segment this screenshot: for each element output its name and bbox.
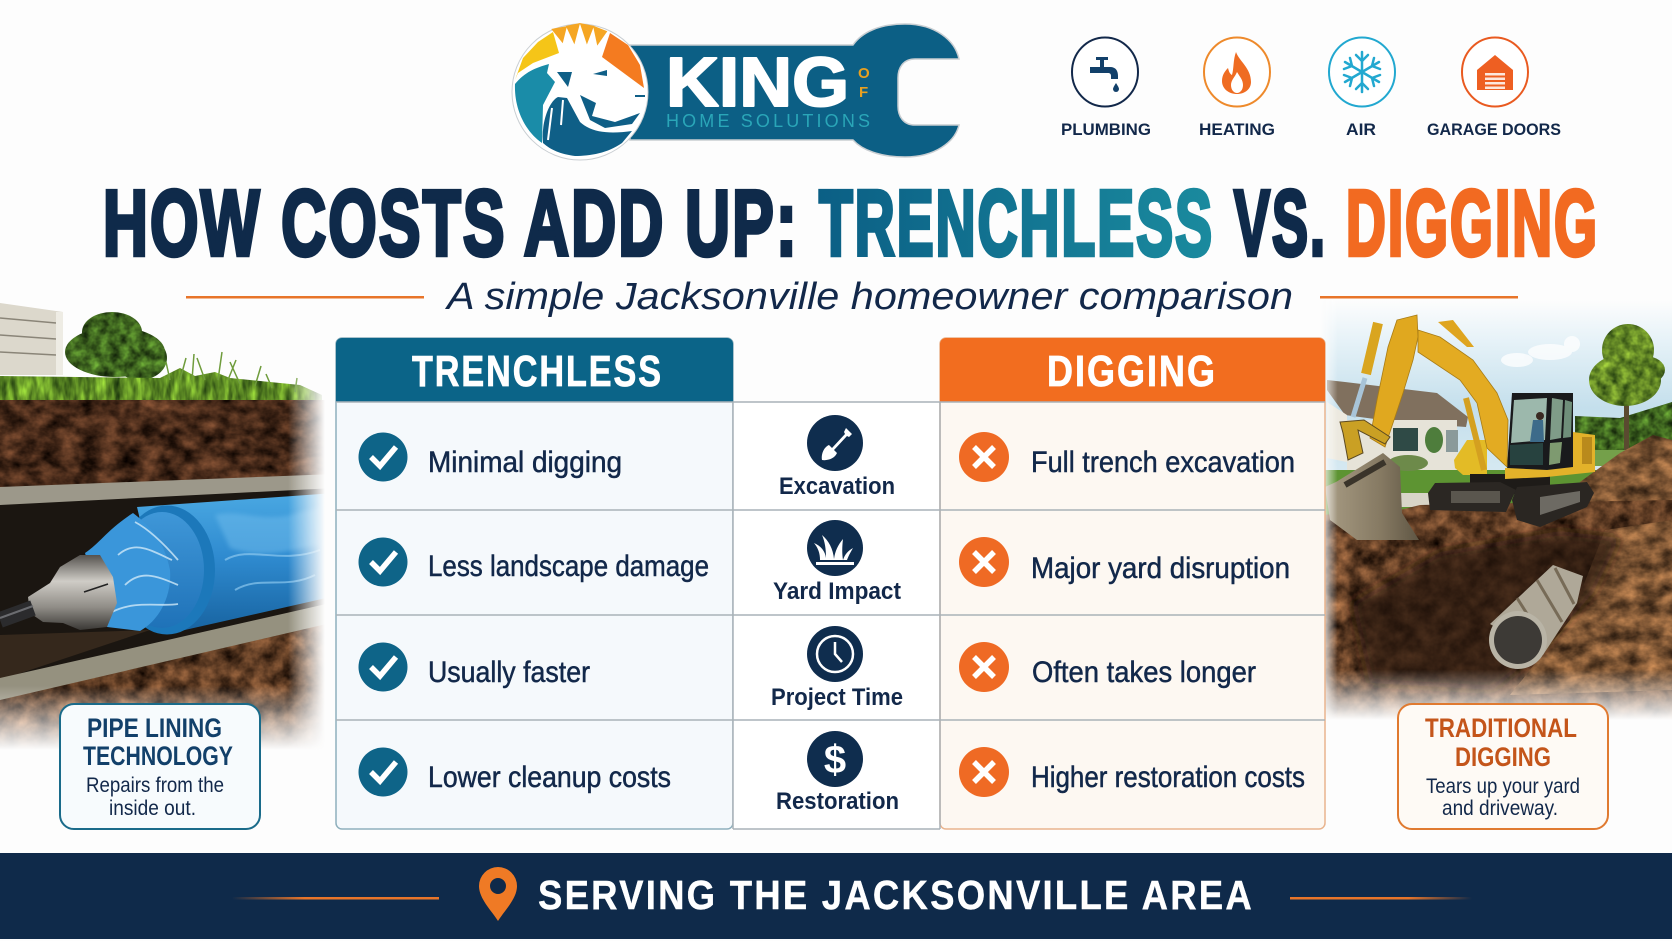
category: restoration: $ — [824, 738, 846, 782]
callout: pipe lining technology: Repairs from the — [86, 774, 224, 797]
rear tracks — [1428, 482, 1516, 512]
footer banner — [0, 853, 1672, 939]
row: usually faster: Usually faster — [428, 656, 590, 689]
row: lower cleanup costs — [358, 748, 671, 796]
logo tagline: HOME SOLUTIONS — [666, 111, 870, 131]
sky — [1326, 315, 1672, 470]
house — [1327, 380, 1468, 471]
category: yard impact: Yard Impact — [773, 578, 901, 605]
grass — [0, 368, 322, 400]
callout: pipe lining technology: TECHNOLOGY — [83, 741, 233, 771]
counterweight — [1454, 440, 1487, 475]
concrete slabs — [0, 474, 335, 505]
category: restoration: Restoration — [776, 788, 899, 815]
blue liner pipe — [137, 493, 335, 634]
undercarriage — [1470, 474, 1550, 494]
hydraulics — [1366, 323, 1378, 374]
bucket — [1325, 453, 1419, 540]
fence — [0, 303, 63, 375]
row: often takes longer: Often takes longer — [1032, 656, 1256, 689]
clouds — [1501, 336, 1580, 367]
row: minimal digging — [358, 432, 622, 482]
title: VS. — [1234, 171, 1327, 275]
trenchless header — [336, 338, 733, 402]
row: lower cleanup costs: Lower cleanup costs — [428, 761, 671, 794]
logo word KING: KING — [666, 43, 849, 121]
footer text: SERVING THE JACKSONVILLE AREA — [538, 872, 1254, 918]
logo word OF: F — [859, 84, 868, 101]
row: less landscape damage: Less landscape damage — [428, 550, 709, 583]
illustration: excavator digging — [1320, 300, 1672, 720]
linkage — [1340, 420, 1390, 460]
icon: lion badge — [512, 24, 648, 160]
dirt pile — [1580, 435, 1672, 502]
stick — [1370, 315, 1418, 447]
right trench wall — [1510, 520, 1672, 695]
title: TRENCHLESS — [819, 171, 1214, 275]
icon: heating — [1204, 38, 1270, 106]
tree — [1589, 324, 1665, 450]
label: plumbing: PLUMBING — [1061, 120, 1151, 139]
panel: digging column: DIGGING — [1047, 347, 1217, 396]
title: HOW COSTS ADD UP: — [103, 171, 799, 275]
row: usually faster — [358, 642, 590, 692]
row: full trench excavation: Full trench excavation — [1031, 446, 1295, 479]
row: higher restoration costs: Higher restoration costs — [1031, 761, 1305, 794]
icon: air — [1329, 38, 1395, 106]
lawn — [1326, 470, 1596, 515]
subtitle: A simple Jacksonville homeowner comparison — [445, 276, 1293, 318]
callout: pipe lining technology — [60, 704, 260, 829]
row: minimal digging: Minimal digging — [428, 446, 622, 479]
callout: pipe lining technology: inside out. — [109, 797, 196, 820]
cab — [1507, 393, 1573, 470]
row: higher restoration costs — [959, 747, 1305, 797]
callout: traditional digging: DIGGING — [1455, 742, 1551, 772]
trench pit — [1352, 531, 1620, 690]
logo: King of Home Solutions — [512, 24, 959, 160]
excavator — [1325, 315, 1595, 540]
callout: traditional digging — [1398, 704, 1608, 829]
bush — [65, 312, 167, 380]
panel: category column — [733, 402, 940, 829]
panel: trenchless column: TRENCHLESS — [412, 347, 663, 396]
service icons — [1061, 38, 1561, 139]
front tracks — [1512, 482, 1594, 527]
panel: trenchless column — [336, 338, 733, 829]
row: often takes longer — [959, 642, 1256, 692]
row: less landscape damage — [358, 538, 709, 586]
logo word OF: O — [858, 65, 870, 82]
buried pipe — [1489, 565, 1583, 669]
digging header — [940, 338, 1325, 402]
upper soil — [0, 400, 335, 488]
category: yard impact — [773, 520, 901, 605]
category: excavation — [779, 415, 895, 500]
row: major yard disruption: Major yard disruption — [1031, 552, 1290, 585]
callout: traditional digging: Tears up your yard — [1426, 775, 1580, 798]
icon: wrench — [630, 24, 959, 157]
tree line — [1575, 402, 1672, 455]
label: garage doors: GARAGE DOORS — [1427, 120, 1561, 139]
illustration: pipe lining cross-section — [0, 303, 335, 750]
icon: location pin — [479, 867, 517, 921]
callout: traditional digging: TRADITIONAL — [1425, 713, 1577, 743]
label: air: AIR — [1346, 120, 1376, 139]
category: project time: Project Time — [771, 684, 903, 711]
icon: plumbing — [1072, 38, 1138, 106]
icon: garage doors — [1462, 38, 1528, 106]
nozzle and cable — [28, 555, 117, 630]
category: project time — [771, 626, 903, 711]
callout: pipe lining technology: PIPE LINING — [87, 713, 222, 743]
boom — [1418, 330, 1508, 467]
row: full trench excavation — [959, 432, 1295, 482]
category: excavation: Excavation — [779, 473, 895, 500]
category: restoration — [776, 731, 899, 815]
title — [103, 171, 1599, 275]
panel: digging column — [940, 338, 1325, 829]
row: major yard disruption — [959, 537, 1290, 587]
ground dirt — [1320, 500, 1672, 720]
tunnel cavity — [0, 487, 335, 680]
callout: traditional digging: and driveway. — [1442, 797, 1558, 820]
label: heating: HEATING — [1199, 120, 1275, 139]
lower soil — [0, 625, 324, 748]
engine body — [1505, 432, 1595, 479]
logo word OF — [858, 65, 870, 101]
